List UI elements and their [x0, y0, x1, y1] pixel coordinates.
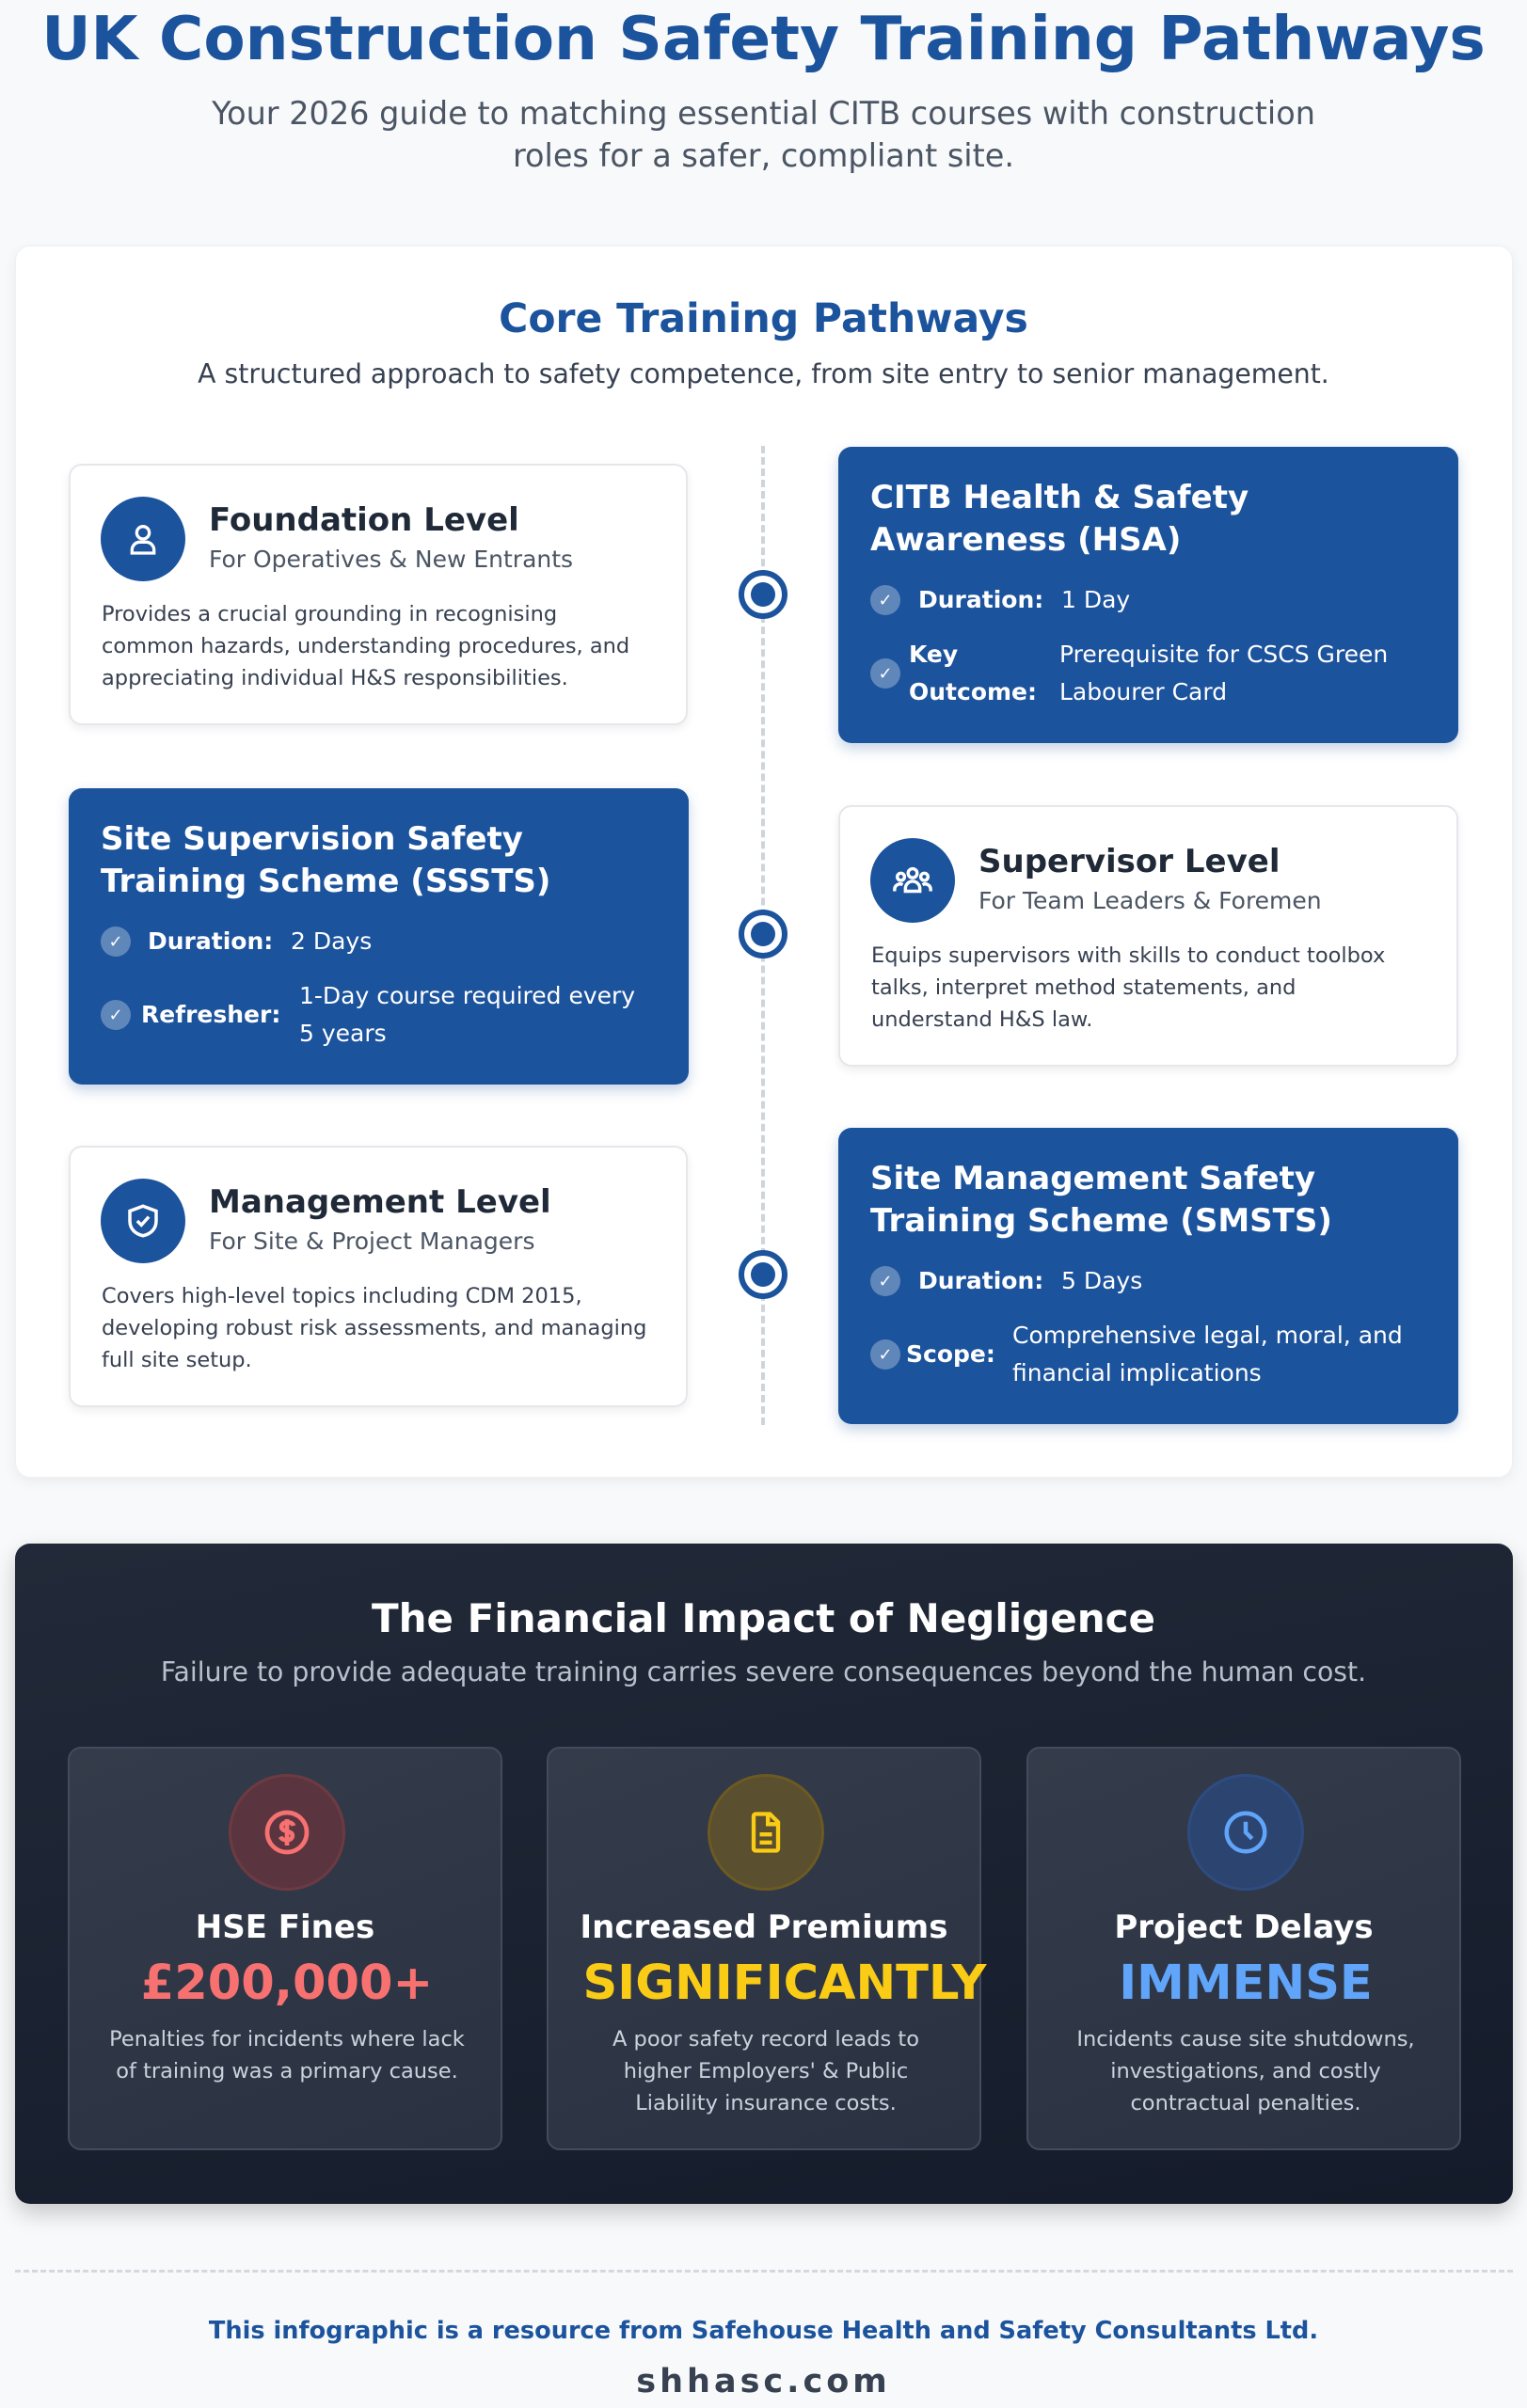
description: developing robust risk assessments, and managing [102, 1316, 646, 1340]
heading: core training pathways: Core Training Pathways [499, 296, 1028, 342]
value: duration: 2 Days [291, 927, 372, 955]
icon: team [870, 838, 955, 923]
subtitle: roles for a safer, compliant site. [513, 137, 1014, 174]
card: HSE fines [68, 1747, 502, 2150]
icon: shield [101, 1179, 185, 1263]
footer: credit: This infographic is a resource from Safehouse Health and Safety Consultants Ltd. [209, 2317, 1318, 2345]
title: HSE Fines [196, 1909, 374, 1946]
timeline dot 2 [739, 910, 787, 958]
card: management level [69, 1146, 688, 1407]
divider [15, 2270, 1513, 2273]
heading: CITB Health & Safety [870, 479, 1249, 516]
card: SMSTS [838, 1128, 1458, 1424]
subtitle: Your 2026 guide to matching essential CITB courses with construction [212, 95, 1315, 132]
description: Provides a crucial grounding in recognising [102, 602, 557, 626]
timeline line [761, 446, 765, 1425]
card: HSA [838, 447, 1458, 743]
heading [101, 820, 550, 900]
heading: Training Scheme (SSSTS) [101, 863, 550, 900]
heading: Supervisor Level [978, 843, 1280, 880]
panel: financial impact [15, 1544, 1513, 2204]
description: full site setup. [102, 1348, 252, 1372]
value: scope: Comprehensive legal, moral, and [1012, 1322, 1403, 1349]
subheading: For Team Leaders & Foremen [978, 887, 1322, 914]
label: scope: Scope: [906, 1340, 995, 1368]
title: Increased Premiums [581, 1909, 947, 1946]
value: IMMENSE [1119, 1956, 1373, 2011]
label: key outcome: Key [909, 641, 958, 668]
subheading: For Operatives & New Entrants [209, 546, 573, 573]
card: foundation level [69, 464, 688, 725]
label: key outcome [909, 641, 1037, 705]
timeline dot 3 [739, 1250, 787, 1299]
check: refresher: ✓ [108, 1005, 123, 1025]
description [102, 602, 629, 690]
label: duration: Duration: [918, 1267, 1043, 1294]
description: Liability insurance costs. [635, 2091, 897, 2115]
card: SSSTS [69, 788, 689, 1085]
description: common hazards, understanding procedures, and [102, 634, 629, 658]
value: SIGNIFICANTLY [583, 1956, 986, 2011]
icon: dollar [229, 1774, 345, 1891]
description [871, 943, 1385, 1032]
value: key outcome: Labourer Card [1059, 678, 1227, 705]
heading: Site Management Safety [870, 1160, 1315, 1197]
value: refresher: 5 years [299, 1020, 387, 1047]
heading [870, 1160, 1332, 1240]
check: duration [101, 927, 131, 957]
label: duration: Duration: [148, 927, 273, 955]
heading: Site Supervision Safety [101, 820, 523, 858]
heading [870, 479, 1249, 559]
subtitle [212, 95, 1315, 174]
check: scope: ✓ [878, 1345, 893, 1364]
description: higher Employers' & Public [624, 2059, 908, 2083]
icon: person [101, 497, 185, 581]
text: financial subtitle: Failure to provide adequate training carries severe consequences beyond the human cost. [161, 1656, 1366, 1687]
value: £200,000+ [141, 1956, 433, 2011]
check: scope [870, 1339, 900, 1370]
value: scope: financial implications [1012, 1359, 1262, 1386]
label: key outcome: Outcome: [909, 678, 1037, 705]
description: understand H&S law. [871, 1007, 1092, 1032]
check: duration: ✓ [878, 1272, 893, 1291]
card: supervisor level [838, 805, 1458, 1067]
check: duration: ✓ [108, 931, 123, 952]
heading: Foundation Level [209, 501, 519, 539]
description [612, 2027, 919, 2115]
description: Covers high-level topics including CDM 2015, [102, 1284, 582, 1308]
heading: Training Scheme (SMSTS) [870, 1202, 1332, 1240]
description: A poor safety record leads to [612, 2027, 919, 2052]
subheading: For Site & Project Managers [209, 1228, 534, 1255]
footer: website: shhasc.com [636, 2363, 891, 2400]
value: duration: 5 Days [1061, 1267, 1142, 1294]
description: Penalties for incidents where lack of training was a primary cause. [109, 2027, 465, 2083]
value: key outcome: Prerequisite for CSCS Green [1059, 641, 1388, 668]
check: refresher [101, 1000, 131, 1030]
label: duration: Duration: [918, 586, 1043, 613]
panel: core training pathways [15, 246, 1513, 1478]
title: UK Construction Safety Training Pathways [41, 4, 1486, 74]
check: key outcome [870, 658, 900, 689]
label: refresher: Refresher: [141, 1001, 280, 1028]
icon: document [708, 1774, 824, 1891]
heading: Awareness (HSA) [870, 521, 1181, 559]
check: duration: ✓ [878, 591, 893, 610]
value: scope [1012, 1322, 1403, 1386]
value: refresher: 1-Day course required every [299, 982, 635, 1009]
card: increased premiums [547, 1747, 981, 2150]
check: duration [870, 1266, 900, 1296]
value: refresher [299, 982, 635, 1047]
title: Project Delays [1114, 1909, 1374, 1946]
description [102, 1284, 646, 1372]
description: talks, interpret method statements, and [871, 975, 1296, 1000]
card: project delays [1026, 1747, 1461, 2150]
text: pathways subtitle: A structured approach to safety competence, from site entry to senior management. [198, 358, 1329, 389]
description: appreciating individual H&S responsibilities. [102, 666, 568, 690]
value: key outcome [1059, 641, 1388, 705]
description: Equips supervisors with skills to conduct toolbox [871, 943, 1385, 968]
description: Incidents cause site shutdowns, investigations, and costly contractual penalties. [1076, 2027, 1415, 2115]
icon: clock [1187, 1774, 1304, 1891]
check: duration [870, 585, 900, 615]
value: duration: 1 Day [1061, 586, 1130, 613]
heading: Management Level [209, 1183, 551, 1221]
check: key outcome: ✓ [878, 664, 893, 683]
timeline dot 1 [739, 570, 787, 619]
heading: financial impact: The Financial Impact of Negligence [372, 1595, 1155, 1641]
